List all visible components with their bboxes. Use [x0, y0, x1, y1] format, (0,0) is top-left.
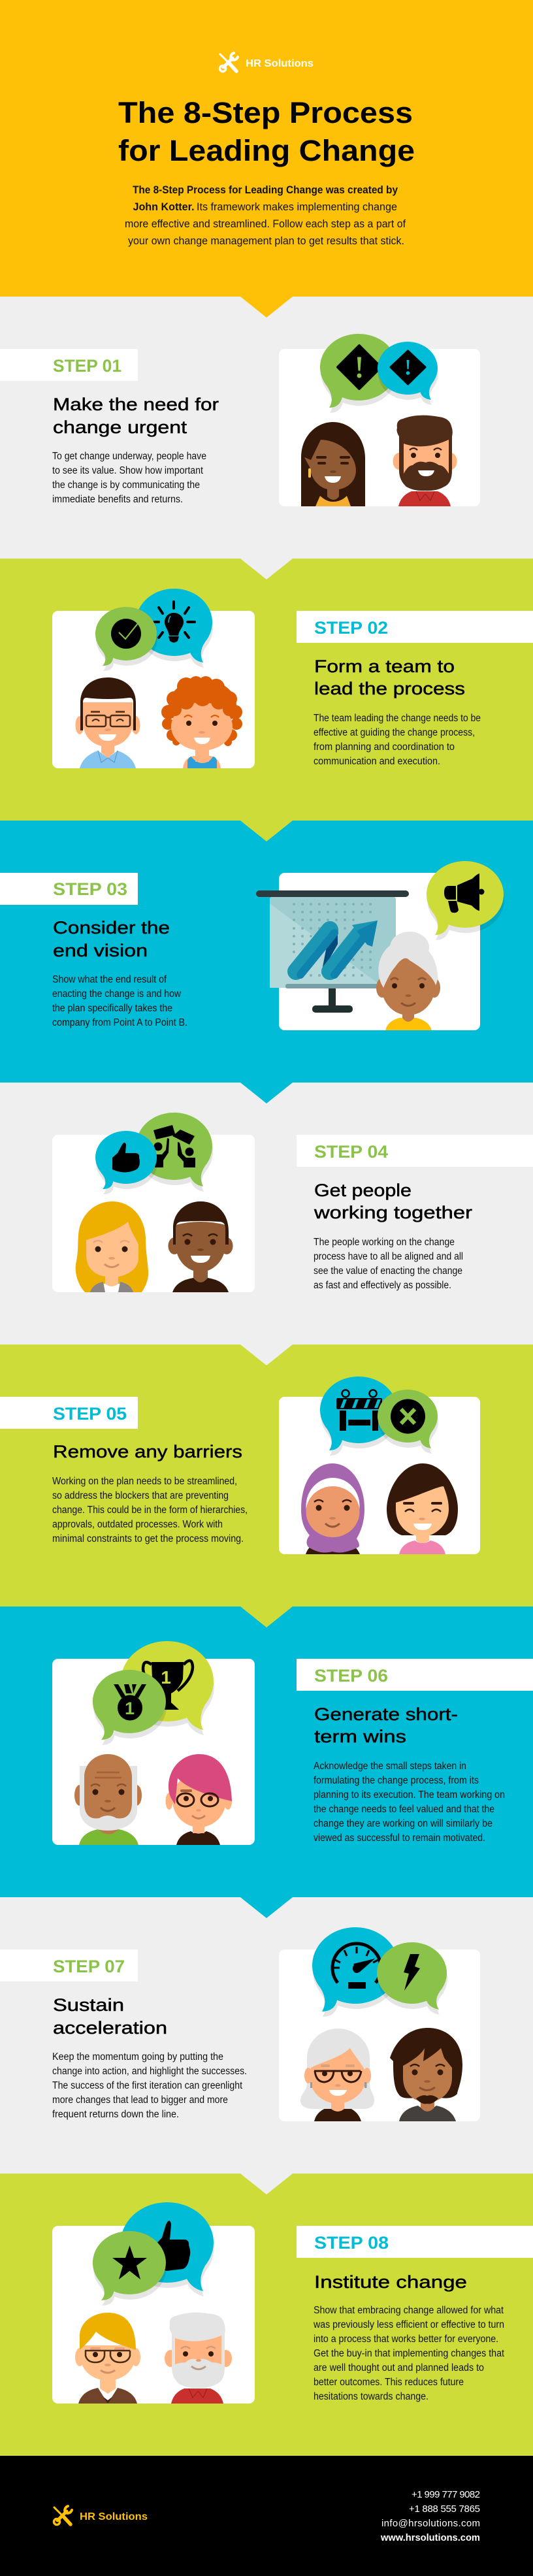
person: blonde woman [76, 1201, 148, 1292]
heading: step 07: acceleration [53, 2018, 167, 2038]
text: step 02: The team leading the change needs to be [314, 713, 481, 724]
text: step 08: Get the buy-in that implementing changes that [314, 2348, 505, 2359]
text: step 07: Keep the momentum going by putting the [52, 2051, 223, 2062]
icon: footer logo [54, 2506, 72, 2524]
illustration card: step 02 [52, 611, 255, 768]
panel: step 07 [0, 1897, 533, 2174]
panel: step 02 [0, 559, 533, 821]
text: step 05: approvals, outdated processes. Work with [52, 1519, 223, 1530]
arrow: step 05 pointer [240, 1606, 293, 1627]
person: older bald man with white beard [74, 1754, 142, 1845]
illustration card: step 04 [52, 1135, 255, 1292]
step label 02 [297, 611, 533, 643]
text: step 04: see the value of enacting the change [314, 1265, 462, 1277]
icon: blue speech bubble with barrier [320, 1377, 398, 1456]
heading: step 02: Form a team to [314, 657, 455, 676]
person: man with long dark hair [390, 2028, 462, 2121]
text: step 08: Show that embracing change allowed for what [314, 2305, 504, 2316]
person: older man with white beard [165, 2313, 232, 2404]
text: step 05: minimal constraints to get the process moving. [52, 1533, 244, 1544]
text: step 03: Show what the end result of [52, 974, 167, 985]
chart: presentation board with rising arrow [256, 890, 409, 1013]
text: step 08: better outcomes. This reduces future [314, 2377, 464, 2388]
heading: step 06: Generate short- [314, 1704, 458, 1724]
arrow: step 01 pointer [240, 559, 293, 579]
text: step 03 [52, 974, 187, 1028]
title: for Leading Change [118, 134, 415, 167]
illustration card: step 05 [279, 1397, 480, 1554]
illustration card: step 08 [52, 2226, 255, 2404]
heading: step 07: Sustain [53, 1995, 124, 2015]
arrow: header pointer [240, 297, 293, 318]
text: step 01 [52, 451, 206, 505]
step label 05: STEP 05 [53, 1404, 127, 1424]
step label 01: STEP 01 [53, 356, 121, 376]
heading: step 06: term wins [314, 1727, 406, 1746]
brand name: HR Solutions [246, 58, 314, 69]
intro text: more effective and streamlined. Follow each step as a part of [125, 218, 406, 230]
text: step 04: process have to all be aligned and all [314, 1251, 463, 1262]
heading: step 02: lead the process [314, 679, 465, 698]
contact details [380, 2489, 480, 2543]
person: older woman with white bun [376, 932, 440, 1030]
icon: green speech bubble with medal [93, 1670, 167, 1745]
intro text: your own change management plan to get results that stick. [128, 235, 404, 247]
arrow: step 02 pointer [240, 821, 293, 841]
person: man with glasses [76, 677, 140, 768]
contact details: +1 888 555 7865 [409, 2503, 480, 2515]
icon: lime speech bubble with trophy [121, 1641, 214, 1735]
text: step 01: to see its value. Show how important [52, 465, 204, 476]
icon: brand logo [219, 53, 238, 72]
text: step 08 [313, 2305, 505, 2402]
step label 04 [297, 1135, 533, 1167]
heading: step 08: Institute change [314, 2272, 467, 2292]
icon: green speech bubble with medal: 1 [125, 1699, 135, 1718]
panel: step 05 [0, 1345, 533, 1606]
icon: blue speech bubble with warning [378, 342, 438, 405]
text: step 07: change into action, and highlight the successes. [52, 2066, 247, 2077]
intro text: The 8-Step Process for Leading Change was created by [133, 184, 398, 196]
heading: step 03: end vision [53, 941, 148, 960]
text: step 06: the change needs to feel valued and that the [314, 1804, 494, 1815]
text: step 05 [52, 1476, 248, 1544]
text: step 02 [314, 713, 481, 767]
step label 04: STEP 04 [314, 1142, 388, 1162]
text: step 05: so address the blockers that are preventing [52, 1490, 229, 1501]
arrow: step 04 pointer [240, 1345, 293, 1365]
text: step 06: viewed as successful to remain motivated. [314, 1833, 485, 1844]
heading: step 02 [314, 657, 465, 698]
text: step 08: are well thought out and planned leads to [314, 2362, 484, 2373]
icon: green speech bubble with check [95, 607, 157, 671]
text: step 06 [314, 1761, 505, 1844]
step label 01 [0, 349, 138, 381]
arrow: step 06 pointer [240, 1897, 293, 1918]
icon: green speech bubble with protest signs [136, 1113, 213, 1192]
icon: green speech bubble with warning [320, 334, 398, 413]
title: The 8-Step Process [118, 96, 413, 129]
person: bearded man in red shirt [393, 416, 457, 506]
heading: step 04 [314, 1181, 472, 1222]
step label 08: STEP 08 [314, 2233, 389, 2253]
step label 06 [297, 1659, 533, 1691]
arrow: step 07 pointer [240, 2174, 293, 2194]
person: older woman with glasses [300, 2029, 374, 2121]
step label 03: STEP 03 [53, 879, 127, 899]
heading: step 04: Get people [314, 1181, 412, 1200]
text: step 06: change they are working on will similarly be [314, 1818, 493, 1829]
illustration card: step 06 [52, 1659, 255, 1845]
icon: blue speech bubble with thumbs up [121, 2202, 214, 2296]
contact details: +1 999 777 9082 [412, 2489, 480, 2500]
text: step 04: The people working on the change [314, 1237, 455, 1248]
person: woman with pink hair and glasses [166, 1754, 232, 1845]
text: step 07: more changes that lead to bigger and more [52, 2095, 228, 2106]
icon: lime speech bubble with megaphone [427, 861, 504, 940]
panel: step 06 [0, 1606, 533, 1897]
text: step 06: Acknowledge the small steps taken in [314, 1761, 466, 1772]
text: step 03: enacting the change is and how [52, 988, 182, 1000]
step label 06: STEP 06 [314, 1666, 388, 1686]
text: step 04: as fast and effectively as possible. [314, 1280, 451, 1291]
heading: step 04: working together [314, 1203, 472, 1222]
person: woman with long dark hair [301, 422, 365, 506]
heading: step 01 [53, 395, 219, 437]
text: step 07: frequent returns down the line. [52, 2109, 179, 2120]
heading: step 01: change urgent [53, 417, 187, 437]
text: step 06: planning to its execution. The team working on [314, 1789, 505, 1801]
heading: step 05: Remove any barriers [53, 1442, 242, 1461]
footer brand name: HR Solutions [80, 2511, 148, 2522]
text: step 04 [314, 1237, 463, 1291]
illustration card: step 07 [279, 1949, 480, 2121]
person: dark-skinned man [169, 1201, 233, 1292]
heading: step 01: Make the need for [53, 395, 219, 414]
person: blond man with glasses [75, 2313, 140, 2404]
text: step 01: To get change underway, people have [52, 451, 206, 462]
intro text: John Kotter. [133, 201, 195, 213]
person: curly red-haired woman [161, 676, 242, 768]
icon: green speech bubble with star [93, 2231, 167, 2306]
heading: step 07 [53, 1995, 167, 2038]
arrow: step 03 pointer [240, 1083, 293, 1103]
person: woman with dark bob [387, 1463, 458, 1554]
icon: blue speech bubble with speedometer [312, 1927, 399, 2017]
icon: green speech bubble with cross [378, 1390, 438, 1454]
text: step 07 [52, 2051, 247, 2120]
step label 02: STEP 02 [314, 618, 388, 638]
panel: step 04 [0, 1083, 533, 1345]
step label 08 [297, 2226, 533, 2258]
text: step 02: effective at guiding the change process, [314, 727, 475, 738]
panel: step 01 [0, 297, 533, 559]
text: step 06: formulating the change process, from its [314, 1775, 479, 1786]
step label 07: STEP 07 [53, 1957, 125, 1976]
intro text: Its framework makes implementing change [197, 201, 397, 213]
contact details: www.hrsolutions.com [380, 2532, 480, 2543]
icon: blue speech bubble with thumbs up [95, 1131, 157, 1194]
title [118, 96, 415, 167]
panel: step 08 [0, 2174, 533, 2456]
text: step 07: The success of the first iteration can greenlight [52, 2080, 243, 2091]
icon: lime speech bubble with trophy: 1 [161, 1667, 171, 1687]
heading: step 06 [314, 1704, 458, 1746]
intro text [125, 184, 406, 247]
step label 07 [0, 1949, 138, 1981]
icon: green speech bubble with lightning bolt [377, 1942, 447, 2015]
text: step 03: company from Point A to Point B. [52, 1017, 187, 1028]
text: step 08: into a process that works better for everyone. [314, 2334, 498, 2345]
heading: step 03: Consider the [53, 918, 170, 937]
text: step 05: change. This could be in the form of hierarchies, [52, 1505, 248, 1516]
heading: step 03 [53, 918, 170, 960]
text: step 01: the change is by communicating the [52, 480, 200, 491]
panel: footer [0, 2456, 533, 2576]
step label 05 [0, 1397, 138, 1429]
illustration card: step 03 [279, 873, 480, 1030]
text: step 05: Working on the plan needs to be streamlined, [52, 1476, 237, 1487]
panel: step 03 [0, 821, 533, 1083]
person: woman in purple hijab [301, 1463, 364, 1554]
panel: header [0, 0, 533, 297]
text: step 08: hesitations towards change. [314, 2391, 428, 2402]
illustration card: step 01 [279, 349, 480, 506]
text: step 03: the plan specifically takes the [52, 1003, 172, 1014]
text: step 08: was previously less efficient or effective to turn [313, 2319, 504, 2330]
step label 03 [0, 873, 138, 905]
contact details: info@hrsolutions.com [381, 2518, 480, 2529]
text: step 02: from planning and coordination to [314, 742, 455, 753]
text: step 02: communication and execution. [314, 756, 440, 767]
icon: blue speech bubble with lightbulb [136, 589, 213, 668]
text: step 01: immediate benefits and returns. [52, 494, 183, 505]
